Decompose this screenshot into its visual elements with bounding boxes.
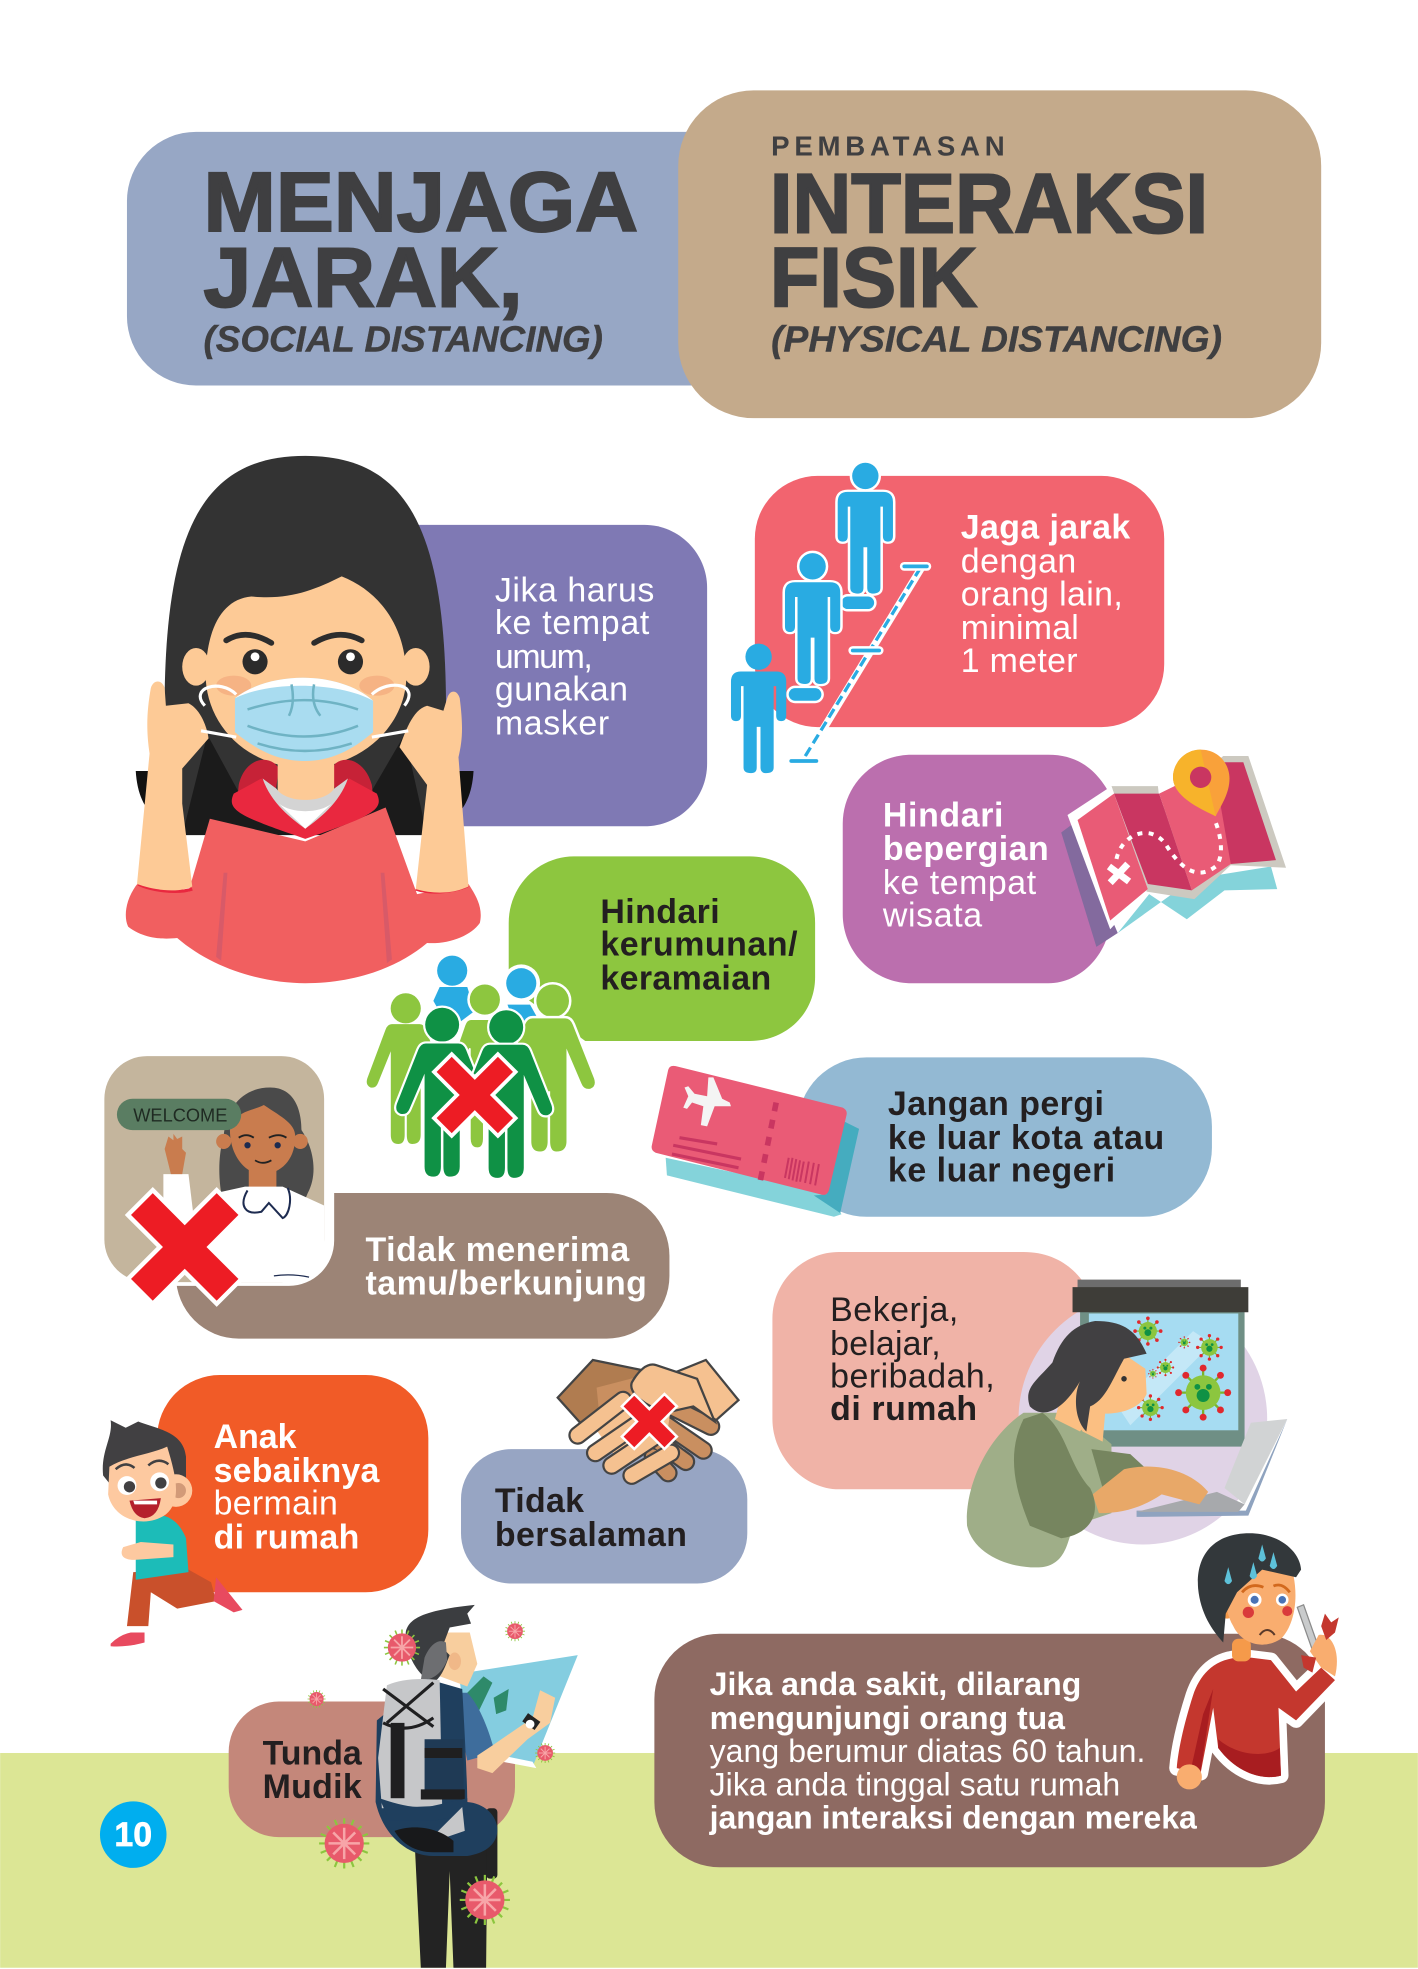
map xyxy=(458,1655,578,1767)
text: hindari kerumunan: Hindari xyxy=(600,893,720,931)
title: jarak: JARAK, xyxy=(204,230,523,324)
text: tidak bersalaman xyxy=(495,1482,687,1554)
text: hindari bepergian: ke tempat xyxy=(883,864,1037,902)
panel: hindari bepergian xyxy=(843,750,1286,983)
text: jangan pergi: Jangan pergi xyxy=(888,1085,1104,1123)
header panel: menjaga jarak xyxy=(127,132,780,386)
ground band xyxy=(0,1753,1418,1968)
panel: tidak bersalaman xyxy=(461,1449,747,1583)
text: bekerja: Bekerja, xyxy=(830,1291,958,1329)
text: anak: sebaiknya xyxy=(214,1452,381,1490)
text: jangan pergi xyxy=(888,1085,1164,1190)
title: interaksi: INTERAKSI xyxy=(770,156,1208,250)
text: jangan pergi: ke luar negeri xyxy=(888,1152,1115,1190)
text: anak: Anak xyxy=(214,1418,297,1456)
window xyxy=(1080,1308,1245,1447)
welcome sign xyxy=(117,1099,241,1130)
text: tunda mudik: Mudik xyxy=(263,1768,362,1806)
eyes and mouth xyxy=(1248,1593,1262,1607)
icon: red cross xyxy=(96,1158,274,1336)
text: jika anda sakit: Jika anda sakit, dilarang xyxy=(710,1666,1081,1702)
text: jika anda sakit: yang berumur diatas 60 tahun. xyxy=(710,1733,1145,1769)
text: jika anda sakit xyxy=(709,1666,1198,1835)
thermometer and hand xyxy=(1297,1605,1319,1650)
text: bekerja: beribadah, xyxy=(830,1358,995,1396)
text: masker xyxy=(495,571,654,743)
panel: jangan pergi keluar kota xyxy=(652,1057,1212,1217)
face xyxy=(1219,1594,1235,1619)
face mask xyxy=(200,685,409,737)
hood and collar xyxy=(236,760,374,810)
text: masker: gunakan xyxy=(495,671,628,709)
text: masker: ke tempat xyxy=(495,604,650,642)
head xyxy=(433,1632,477,1686)
text: jaga jarak: minimal xyxy=(961,609,1079,647)
panel: anak di rumah xyxy=(157,1375,428,1592)
arm xyxy=(453,1693,495,1761)
backpack xyxy=(376,1679,497,1856)
text: hindari bepergian: bepergian xyxy=(883,830,1049,868)
text: jaga jarak: orang lain, xyxy=(961,575,1123,613)
sweat drops xyxy=(1224,1545,1277,1584)
panel: jaga jarak xyxy=(731,463,1164,773)
text: tidak menerima tamu xyxy=(366,1231,647,1303)
sweater xyxy=(126,807,481,983)
panel: jika anda sakit xyxy=(654,1634,1325,1867)
illustration: backpacker with map and viruses xyxy=(308,1605,578,1968)
subtitle: physical distancing: (PHYSICAL DISTANCING) xyxy=(771,319,1222,360)
text: anak: bermain xyxy=(214,1484,338,1522)
panel: hindari kerumunan xyxy=(502,856,815,1041)
legs xyxy=(415,1840,487,1968)
text: jika anda sakit: jangan interaksi dengan mereka xyxy=(709,1799,1198,1835)
arms and hands xyxy=(137,682,209,890)
text: hindari kerumunan: keramaian xyxy=(600,960,771,998)
illustration: running boy xyxy=(103,1420,242,1647)
text: bekerja: di rumah xyxy=(830,1390,977,1428)
text: hindari kerumunan: kerumunan/ xyxy=(600,926,798,964)
text: tidak bersalaman: Tidak xyxy=(495,1482,584,1520)
text: hindari kerumunan xyxy=(600,893,798,998)
subtitle: social distancing: (SOCIAL DISTANCING) xyxy=(204,319,603,360)
title: menjaga jarak: MENJAGA xyxy=(204,155,638,249)
text: masker: Jika harus xyxy=(495,571,654,609)
text: tunda mudik xyxy=(263,1734,363,1806)
text: anak: di rumah xyxy=(214,1518,359,1556)
icon: handshake with cross xyxy=(558,1360,739,1475)
panel: gunakan masker xyxy=(402,525,707,826)
text: tidak menerima tamu: Tidak menerima xyxy=(366,1231,630,1269)
text: bekerja xyxy=(830,1291,995,1428)
title: fisik: FISIK xyxy=(770,230,977,324)
illustration: welcome host with cross xyxy=(88,1049,334,1336)
panel: tidak menerima tamu xyxy=(176,1193,669,1339)
page number xyxy=(100,1801,167,1868)
panel: tunda mudik xyxy=(229,1702,515,1837)
text: jika anda sakit: Jika anda tinggal satu rumah xyxy=(710,1767,1120,1803)
text: jaga jarak: 1 meter xyxy=(961,642,1078,680)
illustration: girl with mask xyxy=(126,456,481,983)
text: jaga jarak xyxy=(961,509,1130,680)
text: jaga jarak: Jaga jarak xyxy=(961,509,1130,547)
text: tidak menerima tamu: tamu/berkunjung xyxy=(366,1265,647,1303)
text: hindari bepergian xyxy=(882,796,1049,935)
page number: 10 xyxy=(114,1816,152,1854)
viruses xyxy=(1175,1365,1231,1421)
laptop xyxy=(1224,1419,1287,1504)
text: jika anda sakit: mengunjungi orang tua xyxy=(710,1700,1066,1736)
text: bekerja: belajar, xyxy=(830,1325,941,1363)
icon: three people with distance measure xyxy=(731,463,927,773)
icon: map with pin xyxy=(1061,750,1286,947)
text: hindari bepergian: wisata xyxy=(882,897,982,935)
illustration: welcome host with cross: WELCOME xyxy=(133,1104,227,1125)
body xyxy=(1177,1658,1335,1777)
illustration: woman working at laptop near window xyxy=(967,1280,1287,1567)
hair xyxy=(1198,1533,1301,1643)
viruses xyxy=(384,1629,420,1666)
panel: bekerja di rumah xyxy=(772,1252,1090,1489)
text: jaga jarak: dengan xyxy=(961,543,1076,581)
text: masker: umum, xyxy=(495,638,593,676)
text: tunda mudik: Tunda xyxy=(263,1734,363,1772)
woman xyxy=(967,1413,1111,1567)
text: masker: masker xyxy=(495,705,609,743)
header panel: pembatasan interaksi fisik xyxy=(678,90,1321,418)
illustration: sick man with thermometer xyxy=(1177,1533,1339,1789)
text: anak xyxy=(214,1418,381,1556)
text: jangan pergi: ke luar kota atau xyxy=(888,1119,1164,1157)
text: hindari bepergian: Hindari xyxy=(883,796,1003,834)
text: tidak bersalaman: bersalaman xyxy=(495,1516,687,1554)
icon: plane ticket xyxy=(652,1066,859,1217)
icon: crowd with red cross xyxy=(367,956,595,1178)
subtitle: pembatasan: PEMBATASAN xyxy=(771,131,1005,162)
